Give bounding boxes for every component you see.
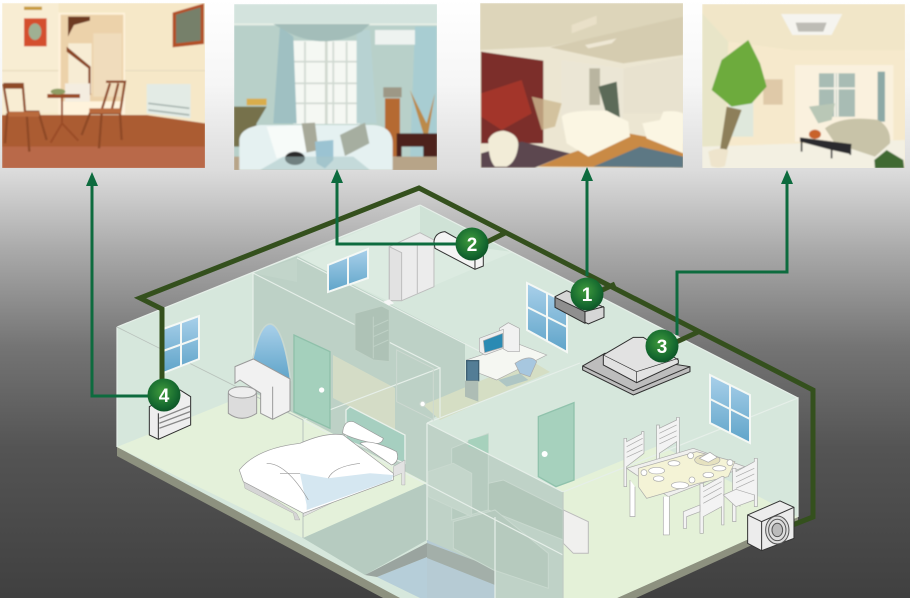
door: dining xyxy=(538,403,574,487)
bed xyxy=(239,407,405,520)
photo: concealed duct unit room xyxy=(480,3,684,168)
indoor unit 3: ceiling cassette xyxy=(583,337,690,395)
glass wall lines xyxy=(117,205,798,598)
refrigerant pipe network xyxy=(140,188,813,526)
outdoor unit xyxy=(748,501,794,551)
badge 2 xyxy=(456,228,488,260)
badge 4 xyxy=(148,378,180,412)
walls shell xyxy=(117,205,798,598)
photo: floor-standing unit room xyxy=(2,3,205,168)
badge 2: 2 xyxy=(467,235,477,256)
indoor unit 2: wall mounted xyxy=(434,232,483,269)
arrow: unit 1 to photo xyxy=(581,167,593,276)
window: bedroom xyxy=(163,316,199,373)
dining set xyxy=(624,417,757,535)
dining floor xyxy=(555,445,798,598)
indoor unit 4: floor standing xyxy=(149,390,191,439)
indoor unit 1: ceiling concealed xyxy=(555,291,604,324)
wardrobe xyxy=(383,233,434,305)
house cutaway illustration xyxy=(117,205,798,598)
badge 3 xyxy=(646,330,678,362)
kitchen glass block xyxy=(427,423,563,598)
door: bedroom xyxy=(294,335,330,428)
window: dining xyxy=(710,375,750,443)
badge 3: 3 xyxy=(657,337,667,358)
dresser xyxy=(355,306,389,362)
badge 1 xyxy=(570,278,604,310)
photo: ceiling cassette unit room xyxy=(702,4,906,169)
arrow: unit 3 to photo xyxy=(677,170,793,335)
arrow: unit 4 to photo xyxy=(86,172,150,396)
badge 4: 4 xyxy=(159,386,170,407)
vanity table and stool xyxy=(228,324,291,419)
photo: wall-mounted unit room xyxy=(234,4,437,171)
window: office xyxy=(527,283,567,352)
bedroom floor xyxy=(117,392,427,538)
office floor xyxy=(423,360,550,420)
badge 1: 1 xyxy=(582,285,593,306)
computer desk xyxy=(465,323,547,402)
closet room dark partition xyxy=(253,256,465,483)
kitchen stair area xyxy=(377,557,510,598)
window: back room xyxy=(328,249,368,292)
door: closet xyxy=(397,350,433,420)
slab base xyxy=(117,447,798,598)
arrow: unit 2 to photo xyxy=(331,169,458,244)
